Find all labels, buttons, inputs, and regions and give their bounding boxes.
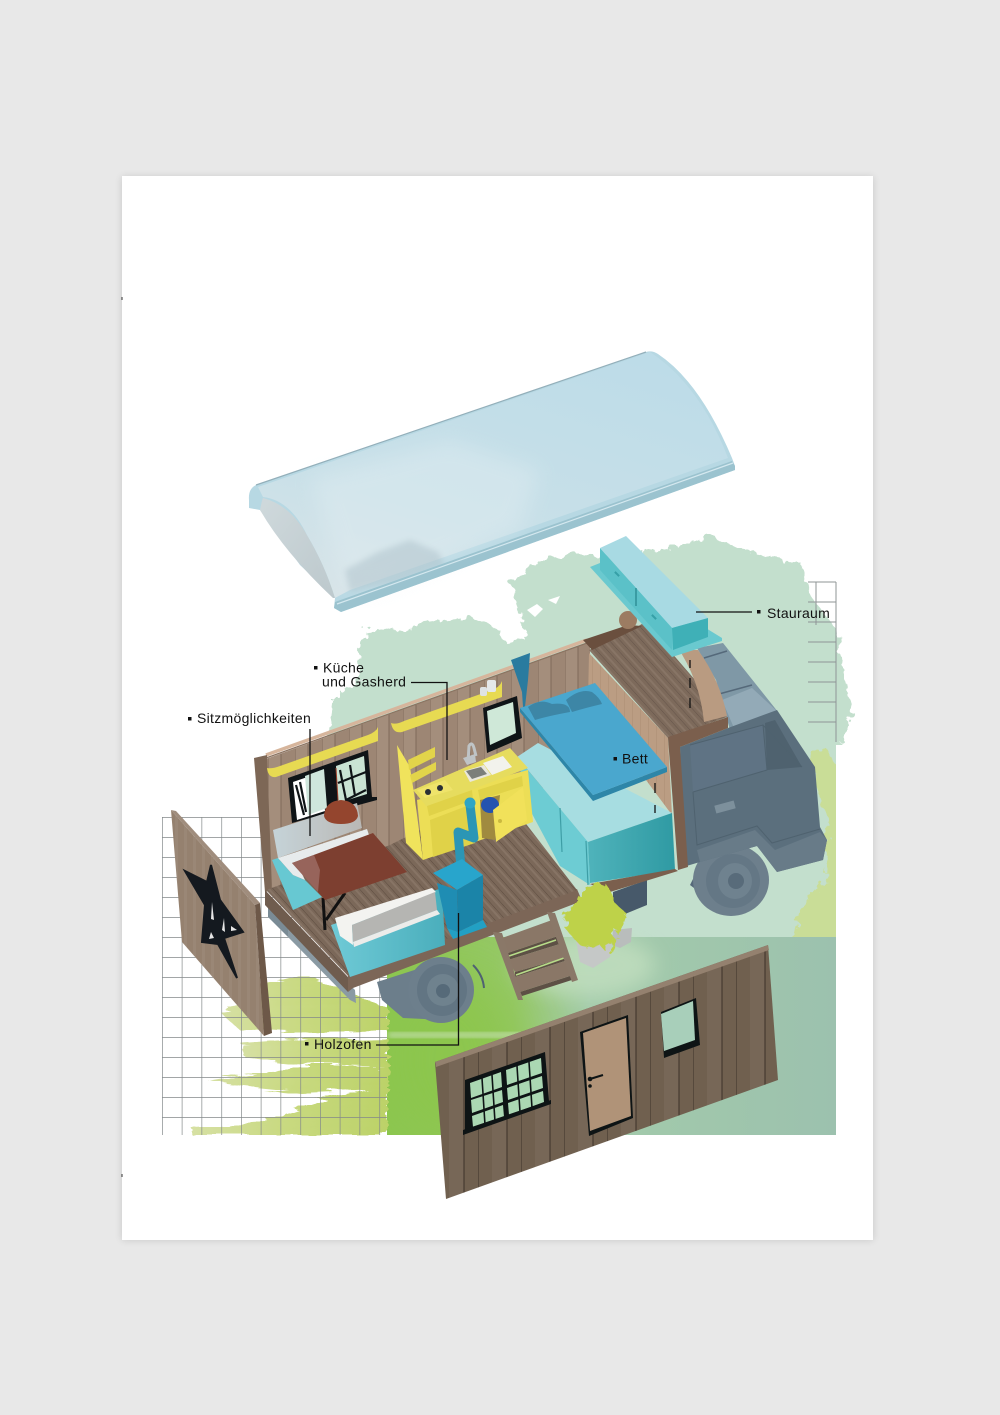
background: mint tree watercolor [327,536,860,980]
gas hob [417,780,453,798]
small window [661,998,700,1058]
sink [463,744,512,782]
cab partition frame [668,717,728,870]
poster sheet [122,176,873,1240]
background: left grid [162,817,387,1135]
background: right grid [808,582,836,742]
label: Bett: Bett [622,750,648,766]
truck [254,536,827,1023]
label: Sitzmöglichkeiten: Sitzmöglichkeiten [197,710,311,726]
door [580,1015,633,1136]
lamp [324,768,358,824]
front cab wheel [690,844,769,916]
label: Sitzmöglichkeiten [188,710,311,836]
back wall [263,640,590,892]
rear bench [272,803,369,910]
curtain [511,653,530,707]
front bench [331,888,445,977]
steps [493,912,578,1000]
floor [265,790,582,992]
storage box [590,536,722,657]
wood stove [433,798,487,939]
chassis block [613,880,647,914]
panel: detached side door with star [171,810,272,1036]
icon: star window [185,865,243,978]
label: Stauraum: Stauraum [767,605,830,621]
panel: roof shell [249,351,735,612]
wall post [254,755,272,892]
background: ground colour block [387,937,836,1135]
table [292,833,407,930]
cab body [680,710,827,872]
label: Bett [614,750,655,813]
panel: detached side wall with door and windows [435,945,778,1199]
cabinet under bed [517,743,678,892]
background: green wash [387,937,657,1135]
label: Küche und Gasherd: Küche [323,660,364,676]
shelf: left yellow rail [267,727,378,777]
bed [520,683,667,801]
shelf: right yellow rail with jars [391,680,502,732]
upper wooden platform [583,611,727,815]
kitchen unit [397,744,533,860]
label: Holzofen [305,913,458,1052]
cabinet doors [427,776,527,857]
potted plant [565,882,632,968]
label: Küche und Gasherd [314,660,447,760]
right window [483,696,522,753]
window with panes [463,1052,551,1135]
cab roof shell [697,643,778,730]
under-floor frame [268,900,356,1003]
label: Stauraum [690,605,830,708]
label: Holzofen: Holzofen [314,1036,372,1052]
background: yellow splash right [792,748,836,937]
background: left yellow watercolor strokes [192,975,388,1135]
left window [288,750,377,823]
label: Küche und Gasherd: und Gasherd [322,674,406,690]
rear wheel [377,957,484,1023]
